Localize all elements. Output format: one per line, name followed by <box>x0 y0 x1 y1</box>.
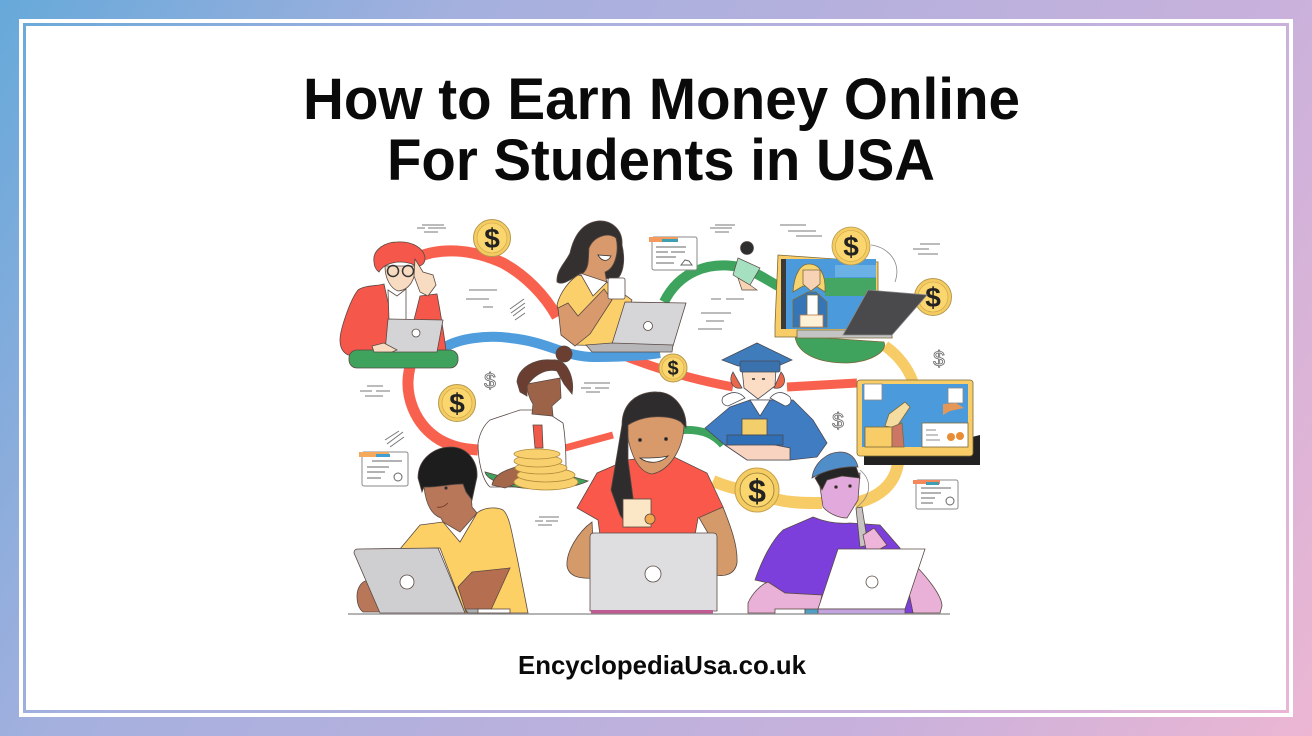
grey laptop <box>354 548 465 613</box>
outline dollar signs: $ <box>832 410 844 433</box>
connecting paths <box>408 251 913 503</box>
laptop <box>611 302 686 347</box>
coin: bottom centre <box>735 468 779 512</box>
coin: left middle <box>438 384 476 422</box>
pencil marks <box>385 299 525 447</box>
decorative note marks <box>360 225 940 525</box>
laptop <box>385 319 443 352</box>
coin: small centre <box>659 354 687 382</box>
coin: small centre: $ <box>667 358 679 380</box>
person: graduate <box>705 343 827 460</box>
person: woman in yellow with laptop <box>557 221 686 352</box>
laptop <box>590 533 717 611</box>
pancakes <box>514 449 578 490</box>
outline dollar signs: $ <box>933 348 945 371</box>
white laptop <box>818 549 925 609</box>
info card: top centre <box>649 237 697 270</box>
title <box>303 67 1020 193</box>
thin arc <box>871 245 897 282</box>
plate <box>485 472 588 489</box>
coin: top left <box>474 220 510 256</box>
title: For Students in USA <box>387 128 935 193</box>
person: man in purple with white laptop <box>748 452 942 614</box>
info card: right <box>913 480 958 509</box>
person: red jacket with laptop <box>340 242 458 368</box>
person: man with pancakes <box>478 346 588 490</box>
coin: left middle: $ <box>449 388 465 419</box>
coin: monitor right: $ <box>925 282 941 313</box>
coin: bottom centre: $ <box>748 473 766 509</box>
coin: monitor right <box>914 278 952 316</box>
green base <box>795 336 885 363</box>
dark laptop <box>843 290 927 335</box>
person: woman in red with laptop <box>567 392 737 614</box>
person: man in yellow with grey laptop <box>354 447 528 613</box>
coin: top left: $ <box>484 223 500 254</box>
coin: monitor top <box>832 227 870 265</box>
website footer: EncyclopediaUsa.co.uk <box>518 650 807 680</box>
person: tiny figure <box>733 242 760 290</box>
coin: monitor top: $ <box>843 231 859 262</box>
green mat <box>349 350 458 368</box>
monitor with teacher <box>775 227 927 363</box>
title: How to Earn Money Online <box>303 67 1020 132</box>
outline dollar signs <box>484 348 945 433</box>
info card: left <box>359 452 408 486</box>
table line <box>348 613 950 615</box>
outline dollar signs: $ <box>484 370 496 393</box>
notice board <box>857 380 980 465</box>
